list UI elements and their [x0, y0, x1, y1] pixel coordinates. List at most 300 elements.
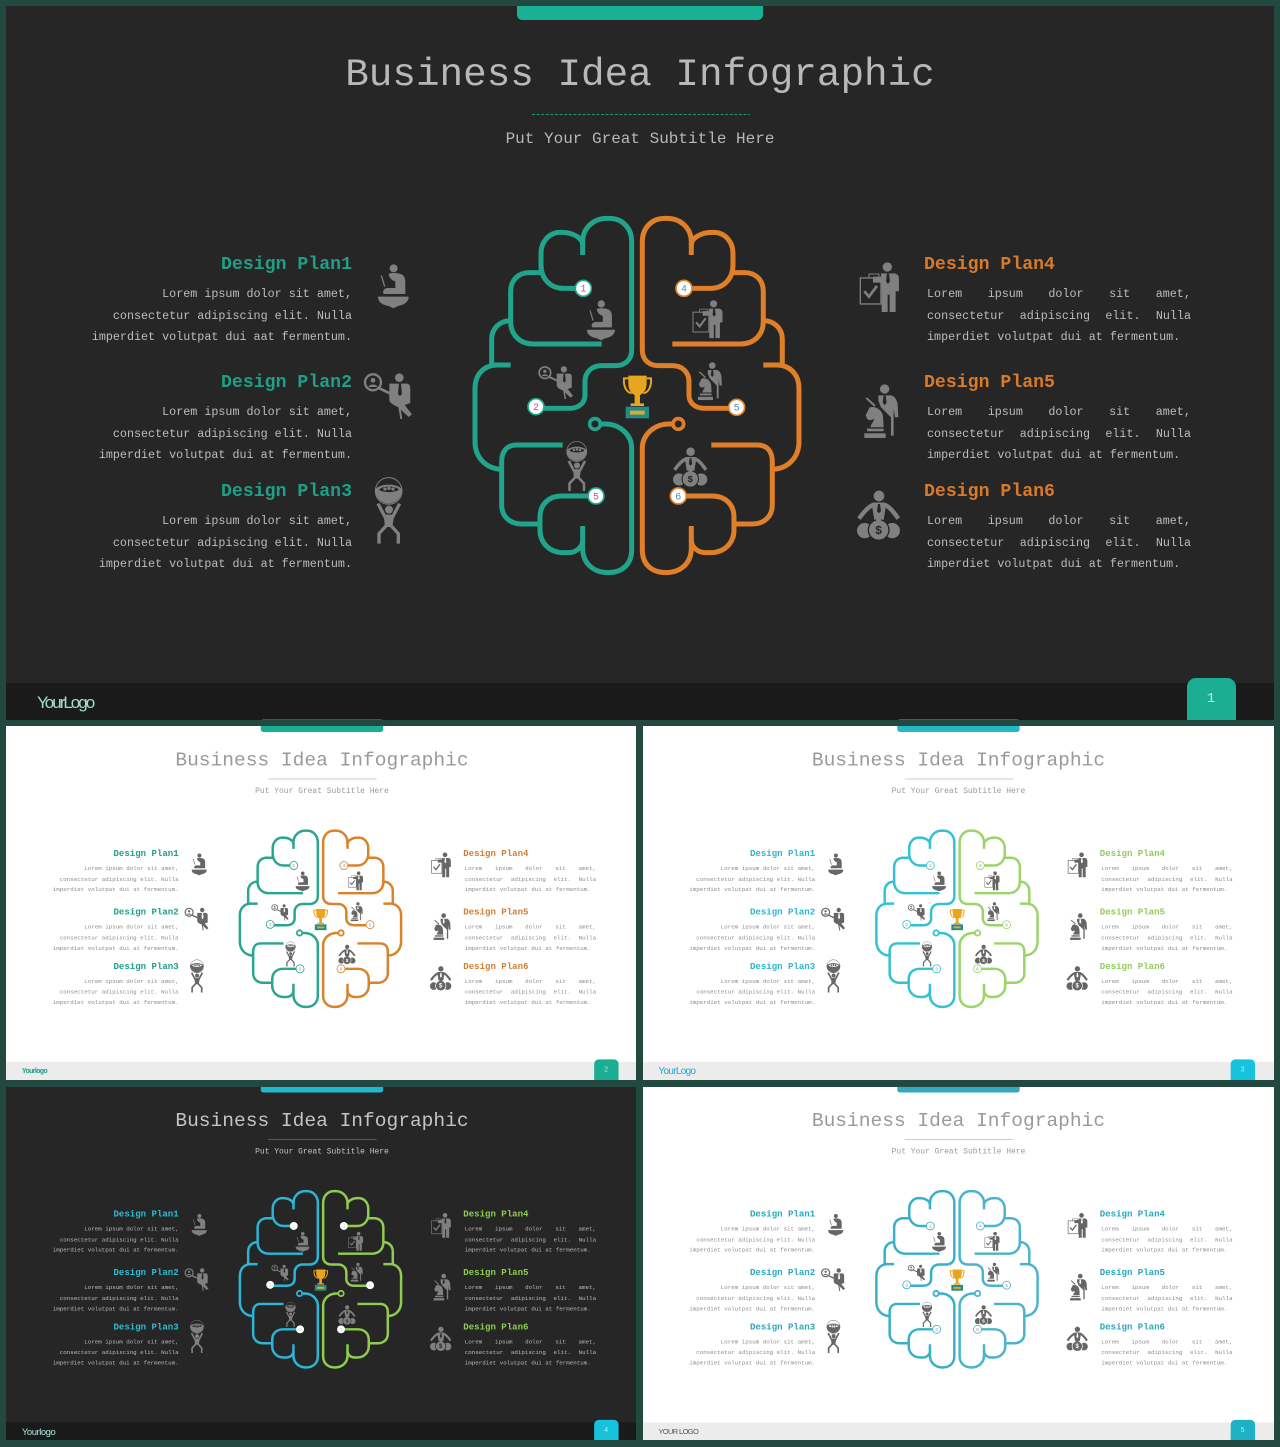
text block: Design Plan2: Design Plan2 [114, 1267, 179, 1278]
text block: Design Plan6: consectetur adipiscing elit. Nulla [465, 989, 597, 996]
node 6: 6 [675, 491, 681, 502]
brain icon 4 [348, 1232, 363, 1251]
node 1: 1 [929, 1224, 932, 1230]
node 5: 5 [369, 1283, 372, 1289]
icon: trophy [950, 1269, 964, 1291]
text block: Design Plan3: consectetur adipiscing elit. Nulla [113, 536, 352, 550]
brain right half [323, 831, 401, 1007]
brain icon 6 [673, 448, 707, 488]
text block: Design Plan1: Design Plan1 [750, 1208, 816, 1219]
text block: Design Plan3 [53, 961, 179, 1006]
text block: Design Plan1 [689, 1208, 816, 1254]
text block: Design Plan6: Design Plan6 [1100, 1321, 1165, 1332]
brain right half [642, 218, 799, 573]
brain icon 3 [922, 942, 932, 966]
text block: Design Plan4: consectetur adipiscing elit. Nulla [1101, 1236, 1233, 1243]
panel: light slide 5 [643, 1080, 1274, 1444]
text block: Design Plan1: Design Plan1 [114, 848, 179, 859]
node 1: 1 [929, 863, 932, 869]
text block: Design Plan2: consectetur adipiscing elit. Nulla [60, 1295, 179, 1302]
subtitle: Put Your Great Subtitle Here [255, 1148, 389, 1157]
node 3 [296, 965, 304, 973]
text block: Design Plan5: imperdiet volutpat dui at fermentum. [1101, 1305, 1227, 1312]
text block: Design Plan1 [53, 848, 179, 893]
page badge: 2 [604, 1066, 608, 1074]
text block: Design Plan3: Lorem ipsum dolor sit amet, [84, 1338, 179, 1345]
logo: YourLogo [37, 693, 95, 712]
node 6 [974, 965, 982, 973]
node 4: 4 [342, 1224, 345, 1230]
node 4: 4 [681, 284, 687, 295]
text block: Design Plan2: consectetur adipiscing elit. Nulla [113, 427, 352, 441]
text block: Design Plan2: imperdiet volutpat dui at fermentum. [689, 945, 815, 952]
text block: Design Plan4: imperdiet volutpat dui at fermentum. [1101, 1247, 1227, 1254]
text block: Design Plan5: consectetur adipiscing elit. Nulla [465, 934, 597, 941]
node 4 [676, 280, 692, 296]
brain icon 5 [987, 902, 999, 921]
brain diagram [876, 831, 1038, 1007]
node 1 [290, 1222, 298, 1230]
icon: man with magnifier [822, 908, 845, 930]
brain icon 4 [348, 871, 363, 890]
icon: trophy [314, 1269, 327, 1291]
icon: man with money bags [430, 1327, 451, 1352]
text block: Design Plan1: Design Plan1 [750, 848, 816, 859]
brain icon 5 [351, 1263, 363, 1282]
text block: Design Plan5 [1100, 1267, 1233, 1312]
node 2: 2 [533, 402, 539, 413]
text block: Design Plan6: imperdiet volutpat dui at fermentum. [465, 1360, 591, 1367]
text block: Design Plan1: consectetur adipiscing elit. Nulla [60, 876, 179, 883]
ring end left [297, 930, 302, 936]
logo: YourLogo [658, 1066, 697, 1077]
title: Business Idea Infographic [812, 749, 1105, 771]
brain icon 5 [351, 902, 363, 921]
text block: Design Plan3: Design Plan3 [114, 1321, 179, 1332]
text block: Design Plan1: imperdiet volutpat dui aat fermentum. [92, 330, 352, 344]
brain icon 3 [922, 1302, 932, 1327]
text block: Design Plan5 [463, 1267, 597, 1312]
text block: Design Plan3 [99, 482, 352, 571]
text block: Design Plan1 [689, 848, 816, 893]
text block: Design Plan3: Lorem ipsum dolor sit amet, [162, 514, 352, 528]
text block: Design Plan5: Lorem ipsum dolor sit amet, [1101, 1284, 1233, 1291]
text block: Design Plan5 [1100, 907, 1233, 952]
title: Business Idea Infographic [812, 1110, 1105, 1132]
text block: Design Plan5: imperdiet volutpat dui at fermentum. [927, 448, 1180, 462]
text block: Design Plan4: consectetur adipiscing elit. Nulla [927, 309, 1191, 323]
ring end right [338, 930, 344, 936]
node 3: 3 [935, 966, 938, 972]
icon: man with checklist [1068, 1213, 1087, 1238]
node 5 [366, 1281, 374, 1289]
text block: Design Plan5: Design Plan5 [1100, 1267, 1165, 1278]
ring end left [297, 1291, 302, 1296]
logo: Yourlogo [22, 1068, 47, 1075]
node 5 [729, 399, 745, 415]
brain icon 1 [932, 871, 946, 891]
brain icon 6 [975, 1305, 992, 1325]
text block: Design Plan3: Design Plan3 [750, 1321, 815, 1332]
icon: trophy [950, 909, 964, 930]
text block: Design Plan1: consectetur adipiscing elit. Nulla [60, 1236, 179, 1243]
text block: Design Plan4: Design Plan4 [1100, 1208, 1166, 1219]
icon: man with checklist [432, 1213, 451, 1238]
page badge [1231, 1420, 1255, 1444]
text block: Design Plan1: Design Plan1 [221, 255, 352, 275]
node 5: 5 [1005, 1283, 1008, 1289]
icon: man with money bags [857, 491, 900, 541]
brain icon 2 [272, 904, 289, 921]
node 4 [976, 862, 984, 869]
icon: trophy [624, 376, 651, 418]
text block: Design Plan3: imperdiet volutpat dui at fermentum. [53, 1360, 179, 1367]
text block: Design Plan1: Design Plan1 [114, 1208, 179, 1219]
text block: Design Plan1: imperdiet volutpat dui at fermentum. [53, 1247, 179, 1254]
text block: Design Plan4: imperdiet volutpat dui at fermentum. [927, 330, 1180, 344]
top tab [261, 1080, 383, 1092]
node 1 [575, 280, 591, 296]
ring end left [933, 1291, 939, 1296]
text block: Design Plan5: consectetur adipiscing elit. Nulla [465, 1295, 597, 1302]
text block: Design Plan6: Lorem ipsum dolor sit amet, [465, 1338, 596, 1345]
brain icon 4 [693, 300, 722, 338]
text block: Design Plan4: Design Plan4 [1100, 848, 1166, 859]
text block: Design Plan5: imperdiet volutpat dui at fermentum. [465, 1305, 591, 1312]
brain icon 1 [296, 871, 310, 891]
text block: Design Plan3 [53, 1321, 179, 1367]
text block: Design Plan6: Design Plan6 [1100, 961, 1165, 972]
icon: man with chess knight [1070, 1274, 1087, 1300]
icon: man with magnifier [185, 908, 209, 930]
node 4: 4 [979, 1224, 982, 1230]
icon: man with checklist [432, 853, 451, 877]
brain icon 3 [285, 942, 296, 966]
text block: Design Plan1: imperdiet volutpat dui at fermentum. [53, 886, 179, 893]
text block: Design Plan4: imperdiet volutpat dui at fermentum. [1101, 886, 1227, 893]
brain left half [240, 1191, 318, 1367]
text block: Design Plan5: Design Plan5 [463, 1267, 528, 1278]
node 4: 4 [342, 863, 345, 869]
node 6 [974, 1325, 982, 1333]
text block: Design Plan5: imperdiet volutpat dui at fermentum. [465, 945, 591, 952]
text block: Design Plan4: Design Plan4 [463, 848, 529, 859]
text block: Design Plan5 [463, 907, 597, 952]
text block: Design Plan3: Design Plan3 [221, 482, 352, 502]
ring end left [933, 930, 939, 936]
icon: man with magnifier [365, 373, 412, 419]
text block: Design Plan3: Lorem ipsum dolor sit amet, [84, 978, 179, 985]
text block: Design Plan4: Lorem ipsum dolor sit amet, [927, 287, 1191, 301]
text block: Design Plan3: consectetur adipiscing elit. Nulla [696, 989, 816, 996]
brain right half [960, 831, 1038, 1007]
text block: Design Plan3: Lorem ipsum dolor sit amet, [721, 978, 815, 985]
text block: Design Plan2: Lorem ipsum dolor sit amet, [721, 1284, 815, 1291]
text block: Design Plan2: consectetur adipiscing elit. Nulla [60, 934, 179, 941]
text block: Design Plan2 [99, 373, 352, 462]
node 6: 6 [340, 966, 343, 972]
text block: Design Plan6: imperdiet volutpat dui at fermentum. [1101, 1360, 1227, 1367]
text block: Design Plan6: consectetur adipiscing elit. Nulla [927, 536, 1191, 550]
panel: light slide 2 [6, 720, 638, 1084]
node 3: 5 [593, 491, 599, 502]
ring end right [975, 930, 980, 936]
icon: person meditating with laptop [378, 264, 409, 308]
brain icon 2 [908, 1265, 925, 1281]
text block: Design Plan5: consectetur adipiscing elit. Nulla [1101, 1295, 1233, 1302]
text block: Design Plan4 [1100, 848, 1233, 893]
node 4 [340, 1222, 348, 1230]
subtitle: Put Your Great Subtitle Here [892, 1148, 1026, 1157]
text block: Design Plan6 [924, 482, 1191, 571]
icon: man with money bags [1066, 1327, 1088, 1352]
brain icon 4 [985, 1232, 1000, 1251]
text block: Design Plan1: imperdiet volutpat dui at fermentum. [689, 1247, 815, 1254]
text block: Design Plan3 [689, 1321, 816, 1367]
text block: Design Plan1: consectetur adipiscing elit. Nulla [696, 876, 816, 883]
text block: Design Plan2: Lorem ipsum dolor sit amet, [162, 405, 352, 419]
brain icon 6 [975, 945, 992, 965]
brain right half [323, 1191, 401, 1367]
top tab [897, 720, 1020, 732]
text block: Design Plan4: imperdiet volutpat dui at fermentum. [465, 886, 591, 893]
panel: dark slide 4 [6, 1080, 638, 1444]
title: Business Idea Infographic [345, 52, 935, 97]
node 6: 6 [976, 966, 979, 972]
node 5 [1003, 921, 1011, 929]
node 3: 3 [935, 1327, 938, 1333]
text block: Design Plan3: consectetur adipiscing elit. Nulla [60, 989, 179, 996]
text block: Design Plan2: consectetur adipiscing elit. Nulla [696, 934, 816, 941]
text block: Design Plan3: imperdiet volutpat dui at fermentum. [689, 1360, 815, 1367]
icon: trophy [314, 909, 327, 930]
text block: Design Plan6: Lorem ipsum dolor sit amet, [1101, 978, 1233, 985]
logo: YOUR LOGO [658, 1427, 699, 1436]
icon: man holding globe [827, 1320, 840, 1353]
icon: man holding globe [190, 1320, 204, 1353]
text block: Design Plan1: Lorem ipsum dolor sit amet, [162, 287, 352, 301]
title: Business Idea Infographic [175, 749, 469, 771]
ring end right [975, 1291, 980, 1296]
text block: Design Plan2: Design Plan2 [221, 373, 352, 393]
brain icon 3 [566, 442, 587, 491]
footer bar [5, 683, 1275, 723]
text block: Design Plan3: imperdiet volutpat dui at fermentum. [53, 999, 179, 1006]
node 2 [266, 1281, 274, 1289]
text block: Design Plan5: Design Plan5 [924, 373, 1055, 393]
node 2 [903, 920, 911, 928]
subtitle: Put Your Great Subtitle Here [506, 130, 774, 148]
brain icon 2 [272, 1265, 289, 1281]
ring end right [338, 1291, 344, 1296]
text block: Design Plan4: Lorem ipsum dolor sit amet, [465, 1225, 596, 1232]
brain icon 2 [908, 904, 925, 921]
text block: Design Plan3: Design Plan3 [750, 961, 815, 972]
text block: Design Plan1: imperdiet volutpat dui at fermentum. [689, 886, 815, 893]
icon: man with chess knight [1070, 913, 1087, 940]
node 2: 2 [905, 922, 908, 928]
text block: Design Plan3: imperdiet volutpat dui at fermentum. [99, 557, 352, 571]
icon: man with magnifier [185, 1268, 209, 1291]
brain right half [960, 1191, 1038, 1367]
brain icon 5 [987, 1263, 999, 1282]
text block: Design Plan5: Design Plan5 [463, 907, 528, 918]
node 3 [588, 488, 604, 504]
page badge: 5 [1241, 1427, 1245, 1435]
icon: man holding globe [827, 960, 840, 993]
text block: Design Plan6: Design Plan6 [463, 961, 528, 972]
text block: Design Plan3: imperdiet volutpat dui at fermentum. [689, 999, 815, 1006]
text block: Design Plan2: Design Plan2 [750, 1267, 815, 1278]
text block: Design Plan6: consectetur adipiscing elit. Nulla [465, 1349, 597, 1356]
text block: Design Plan3: Lorem ipsum dolor sit amet, [721, 1338, 815, 1345]
text block: Design Plan3 [689, 961, 816, 1006]
icon: person meditating with laptop [192, 1214, 207, 1236]
node 3: 3 [299, 1327, 302, 1333]
text block: Design Plan2: Design Plan2 [750, 907, 815, 918]
text block: Design Plan5: consectetur adipiscing elit. Nulla [1101, 934, 1233, 941]
text block: Design Plan1 [53, 1208, 179, 1254]
text block: Design Plan5: consectetur adipiscing elit. Nulla [927, 427, 1191, 441]
text block: Design Plan5: Design Plan5 [1100, 907, 1165, 918]
brain icon 1 [587, 300, 615, 340]
text block: Design Plan4: imperdiet volutpat dui at fermentum. [465, 1247, 591, 1254]
text block: Design Plan4 [463, 1208, 597, 1254]
brain icon 6 [338, 945, 355, 965]
brain left half [876, 1191, 954, 1367]
footer bar [6, 1062, 638, 1084]
text block: Design Plan6: imperdiet volutpat dui at fermentum. [465, 999, 591, 1006]
node 6 [670, 488, 686, 504]
node 1: 1 [292, 863, 295, 869]
icon: man with chess knight [434, 913, 451, 940]
text block: Design Plan2 [689, 907, 816, 952]
text block: Design Plan2 [53, 907, 179, 952]
text block: Design Plan6: consectetur adipiscing elit. Nulla [1101, 1349, 1233, 1356]
ring end right [673, 419, 684, 429]
footer bar [643, 1422, 1274, 1444]
text block: Design Plan1: Lorem ipsum dolor sit amet, [84, 1225, 179, 1232]
text block: Design Plan4: Lorem ipsum dolor sit amet, [465, 865, 596, 872]
node 6 [337, 965, 345, 973]
brain left half [240, 831, 318, 1007]
text block: Design Plan1: Lorem ipsum dolor sit amet, [721, 1225, 815, 1232]
brain left half [876, 831, 954, 1007]
text block: Design Plan6: Lorem ipsum dolor sit amet, [927, 514, 1191, 528]
text block: Design Plan4 [1100, 1208, 1233, 1254]
text block: Design Plan5: Lorem ipsum dolor sit amet, [1101, 924, 1233, 931]
node 2: 2 [269, 922, 272, 928]
node 1 [926, 862, 934, 869]
page badge [1231, 1059, 1255, 1083]
panel: light slide 3 [643, 720, 1274, 1084]
text block: Design Plan2: Lorem ipsum dolor sit amet, [84, 1284, 179, 1291]
brain diagram [475, 218, 799, 573]
text block: Design Plan4: Design Plan4 [463, 1208, 529, 1219]
page badge [594, 1059, 619, 1083]
node 3: 3 [299, 966, 302, 972]
subtitle: Put Your Great Subtitle Here [255, 787, 389, 796]
icon: person meditating with laptop [828, 1214, 843, 1236]
text block: Design Plan2 [53, 1267, 179, 1312]
node 5: 5 [1005, 922, 1008, 928]
footer bar [6, 1422, 638, 1444]
brain icon 1 [296, 1232, 310, 1252]
node 5 [366, 921, 374, 929]
brain diagram [240, 831, 401, 1007]
text block: Design Plan2 [689, 1267, 816, 1312]
node 5: 5 [369, 922, 372, 928]
text block: Design Plan4 [463, 848, 597, 893]
text block: Design Plan4: consectetur adipiscing elit. Nulla [1101, 876, 1233, 883]
ring end left [590, 419, 600, 429]
text block: Design Plan5: Lorem ipsum dolor sit amet, [927, 405, 1191, 419]
brain diagram [876, 1191, 1038, 1367]
top tab [897, 1080, 1020, 1092]
text block: Design Plan2: imperdiet volutpat dui at fermentum. [99, 448, 352, 462]
text block: Design Plan6 [463, 1321, 597, 1367]
footer bar [643, 1062, 1274, 1084]
text block: Design Plan2: imperdiet volutpat dui at fermentum. [53, 945, 179, 952]
node 2: 2 [269, 1283, 272, 1289]
icon: man with magnifier [822, 1268, 845, 1291]
brain icon 4 [985, 871, 1000, 890]
page badge [594, 1420, 619, 1444]
node 2 [266, 920, 274, 928]
brain diagram [240, 1191, 401, 1367]
text block: Design Plan2: consectetur adipiscing elit. Nulla [696, 1295, 816, 1302]
node 3 [933, 1325, 941, 1333]
node 3 [296, 1325, 304, 1333]
text block: Design Plan6: Design Plan6 [924, 482, 1055, 502]
icon: man with checklist [860, 262, 899, 312]
node 6 [337, 1325, 345, 1333]
icon: man holding globe [190, 960, 204, 993]
text block: Design Plan6: consectetur adipiscing elit. Nulla [1101, 989, 1233, 996]
icon: man with money bags [1066, 966, 1088, 991]
text block: Design Plan4: consectetur adipiscing elit. Nulla [465, 1236, 597, 1243]
subtitle: Put Your Great Subtitle Here [892, 787, 1026, 796]
page badge: 3 [1241, 1066, 1245, 1074]
text block: Design Plan3: Design Plan3 [114, 961, 179, 972]
icon: person meditating with laptop [192, 854, 207, 875]
text block: Design Plan5: Lorem ipsum dolor sit amet, [465, 924, 596, 931]
icon: man with money bags [430, 966, 451, 991]
text block: Design Plan6 [1100, 961, 1233, 1006]
text block: Design Plan5: imperdiet volutpat dui at fermentum. [1101, 945, 1227, 952]
brain icon 2 [539, 366, 573, 399]
text block: Design Plan2: Lorem ipsum dolor sit amet, [721, 924, 815, 931]
text block: Design Plan1: consectetur adipiscing elit. Nulla [113, 309, 352, 323]
top tab [517, 0, 763, 20]
brain left half [475, 218, 632, 573]
text block: Design Plan6: Lorem ipsum dolor sit amet, [1101, 1338, 1233, 1345]
panel: main dark slide [5, 0, 1275, 723]
text block: Design Plan6: Design Plan6 [463, 1321, 528, 1332]
logo: Yourlogo [22, 1427, 55, 1438]
node 4 [976, 1222, 984, 1230]
icon: man with checklist [1068, 853, 1087, 877]
node 5: 5 [734, 403, 740, 414]
text block: Design Plan4: consectetur adipiscing elit. Nulla [465, 876, 597, 883]
page badge [1187, 678, 1236, 722]
text block: Design Plan2: imperdiet volutpat dui at fermentum. [689, 1305, 815, 1312]
icon: person meditating with laptop [828, 854, 843, 875]
node 4: 4 [979, 863, 982, 869]
node 5 [1003, 1281, 1011, 1289]
text block: Design Plan4 [924, 255, 1191, 344]
node 2: 2 [905, 1283, 908, 1289]
